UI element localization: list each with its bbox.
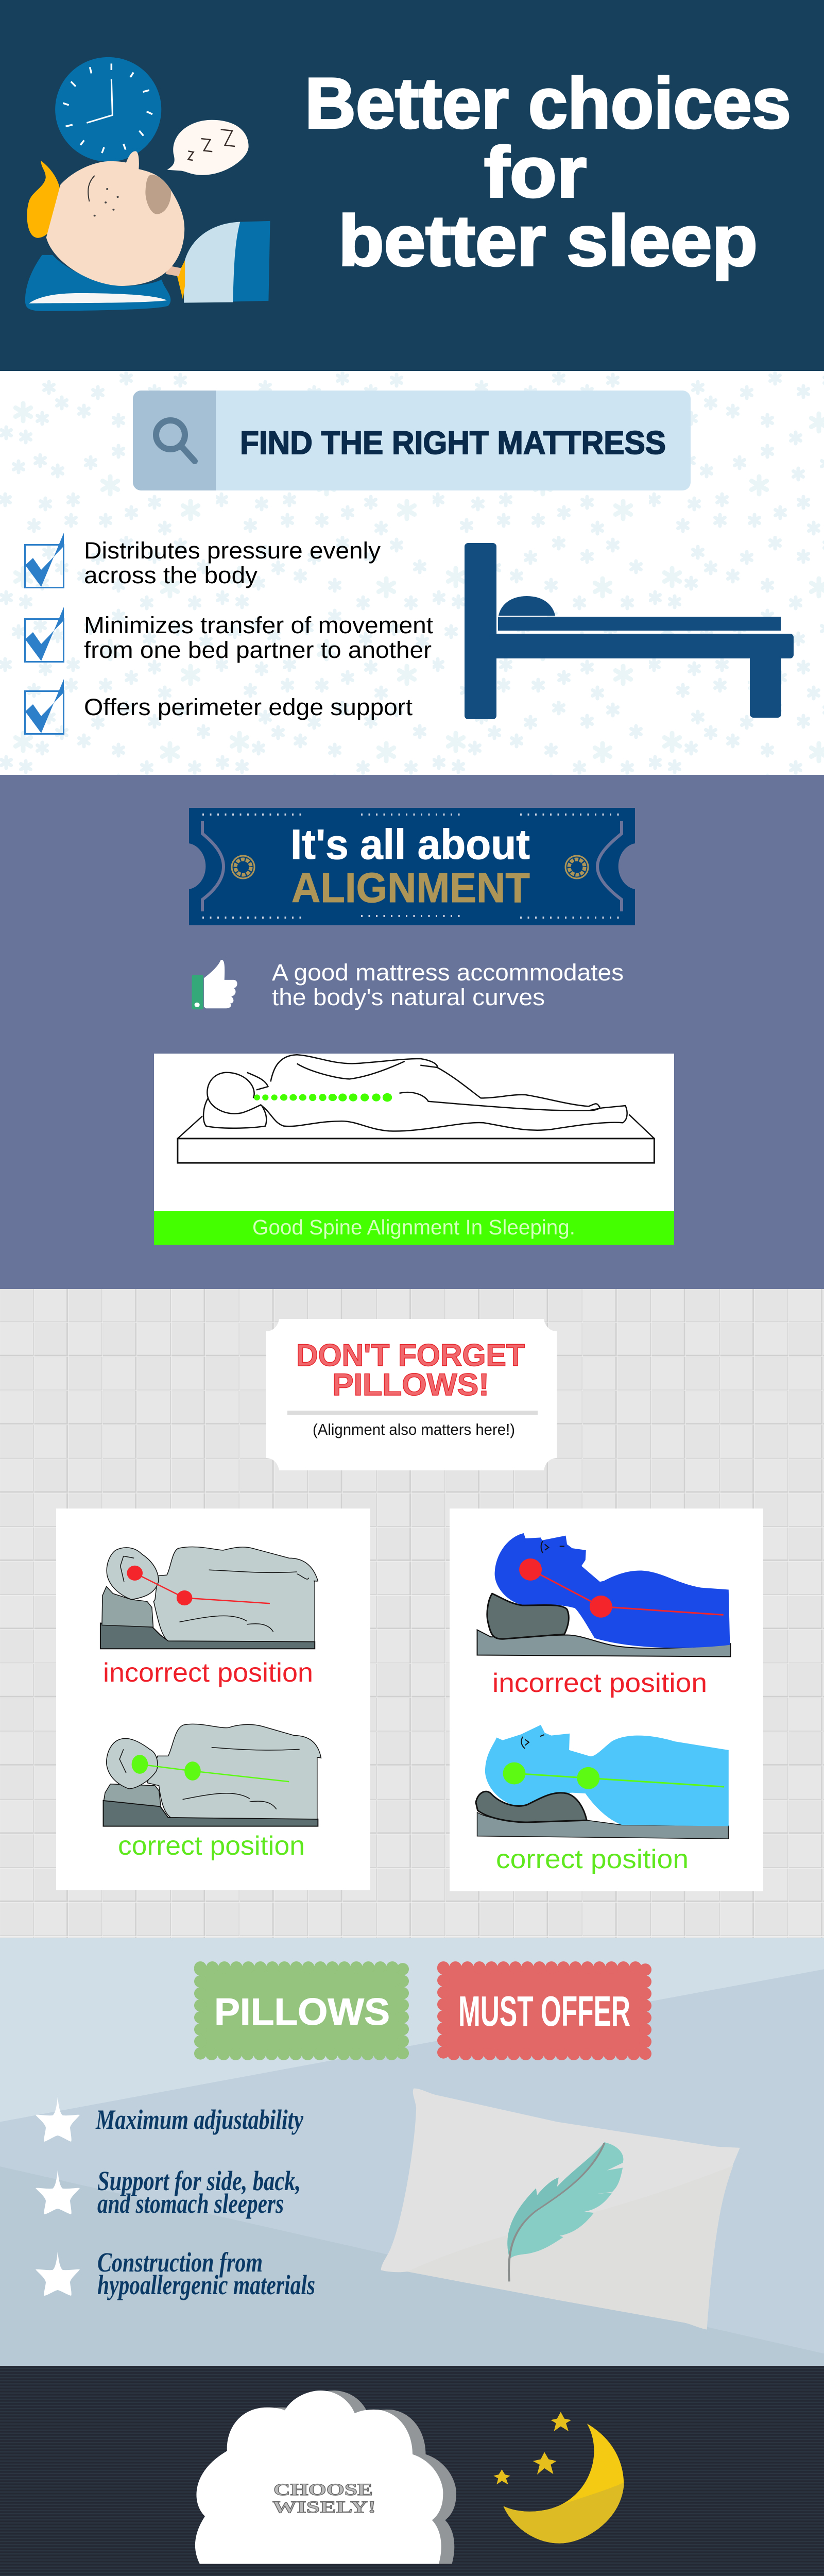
item: maximum adjustability: Maximum adjustability [95,2104,304,2135]
text: good mattress: the body's natural curves [272,984,545,1010]
spine dots [254,1093,392,1101]
label: correct position: correct position [118,1831,305,1861]
item: support: Support for side, back, [97,2165,301,2196]
card: side sleeper [56,1509,370,1890]
cloud [195,2391,456,2564]
icon: pillow behind the head [165,221,270,303]
checklist item 1 [25,533,381,588]
panel: header [0,0,824,371]
checklist item 2 [25,607,434,663]
badge: pillows: PILLOWS [214,1991,390,2033]
icon: speech bubble with Z letters [167,120,249,175]
heading banner: FIND THE RIGHT MATTRESS [240,425,666,461]
text: choose wisely: CHOOSE [273,2481,373,2499]
icon: face [46,151,184,286]
checklist item 2: from one bed partner to another [84,637,432,663]
item: maximum adjustability [36,2097,304,2142]
figure: side sleeper incorrect [100,1547,318,1649]
icon: thumbs up [192,960,237,1009]
caption strip [154,1211,674,1245]
heading card: (Alignment also matters here!) [313,1420,515,1438]
text: choose wisely: WISELY! [272,2498,376,2517]
badge: pillows [200,1968,403,2054]
title: Better choices [305,63,791,143]
heading card [266,1319,557,1470]
panel background [0,1938,824,2366]
icon: bed [465,543,794,719]
image card: good spine alignment [154,1054,674,1245]
heading card: DON'T FORGET [296,1338,525,1372]
text: good mattress [272,959,624,1010]
ticket heading: ALIGNMENT [291,865,530,911]
badge: must offer: MUST OFFER [458,1987,630,2035]
spine line: correct [132,1755,289,1782]
panel: pillows must offer [0,1938,824,2366]
spine line: incorrect [127,1566,270,1605]
figure: back sleeper incorrect [477,1533,730,1657]
item: construction: hypoallergenic materials [97,2269,315,2300]
heading banner [133,391,691,490]
text: good mattress: A good mattress accommodates [272,959,624,986]
title: better sleep [338,201,758,281]
item: construction [36,2247,315,2300]
icon: hair [27,161,61,238]
icon: pillow with feather [381,2089,740,2330]
heading card: PILLOWS! [332,1367,489,1402]
title: for [484,132,587,212]
item: support: and stomach sleepers [97,2188,284,2219]
checklist item 3 [25,679,413,734]
figure: side sleeper correct [104,1724,321,1826]
sleeper line drawing [178,1055,654,1163]
checklist item 3: Offers perimeter edge support [84,694,413,720]
panel: don't forget pillows [0,1289,824,1938]
badge: must offer [443,1968,645,2054]
icon: medallion right [565,856,588,878]
icon: blanket [25,255,170,311]
label: incorrect position: incorrect position [103,1658,313,1688]
card: back sleeper [450,1509,763,1891]
icon: clock [55,57,161,162]
icon: moon and stars [493,2412,624,2544]
checklist item 1: Distributes pressure evenly [84,537,381,564]
label: incorrect position: incorrect position [492,1668,707,1698]
icon: magnifying glass [156,420,195,461]
label: correct position: correct position [496,1844,689,1874]
ticket heading [189,808,635,925]
title [305,63,791,281]
item: support [36,2165,301,2219]
icon: medallion left [232,856,254,878]
caption strip: Good Spine Alignment In Sleeping. [252,1215,575,1239]
figure: back sleeper correct [476,1725,729,1839]
panel: find the right mattress [0,371,824,775]
panel: choose wisely [0,2366,824,2576]
checklist item 1: across the body [84,562,258,588]
item: construction: Construction from [97,2247,263,2278]
ticket heading: It's all about [290,821,530,868]
text: choose wisely [272,2481,376,2517]
illustration: sleeping person with clock [25,57,270,311]
panel: alignment [0,775,824,1289]
checklist item 2: Minimizes transfer of movement [84,612,434,638]
